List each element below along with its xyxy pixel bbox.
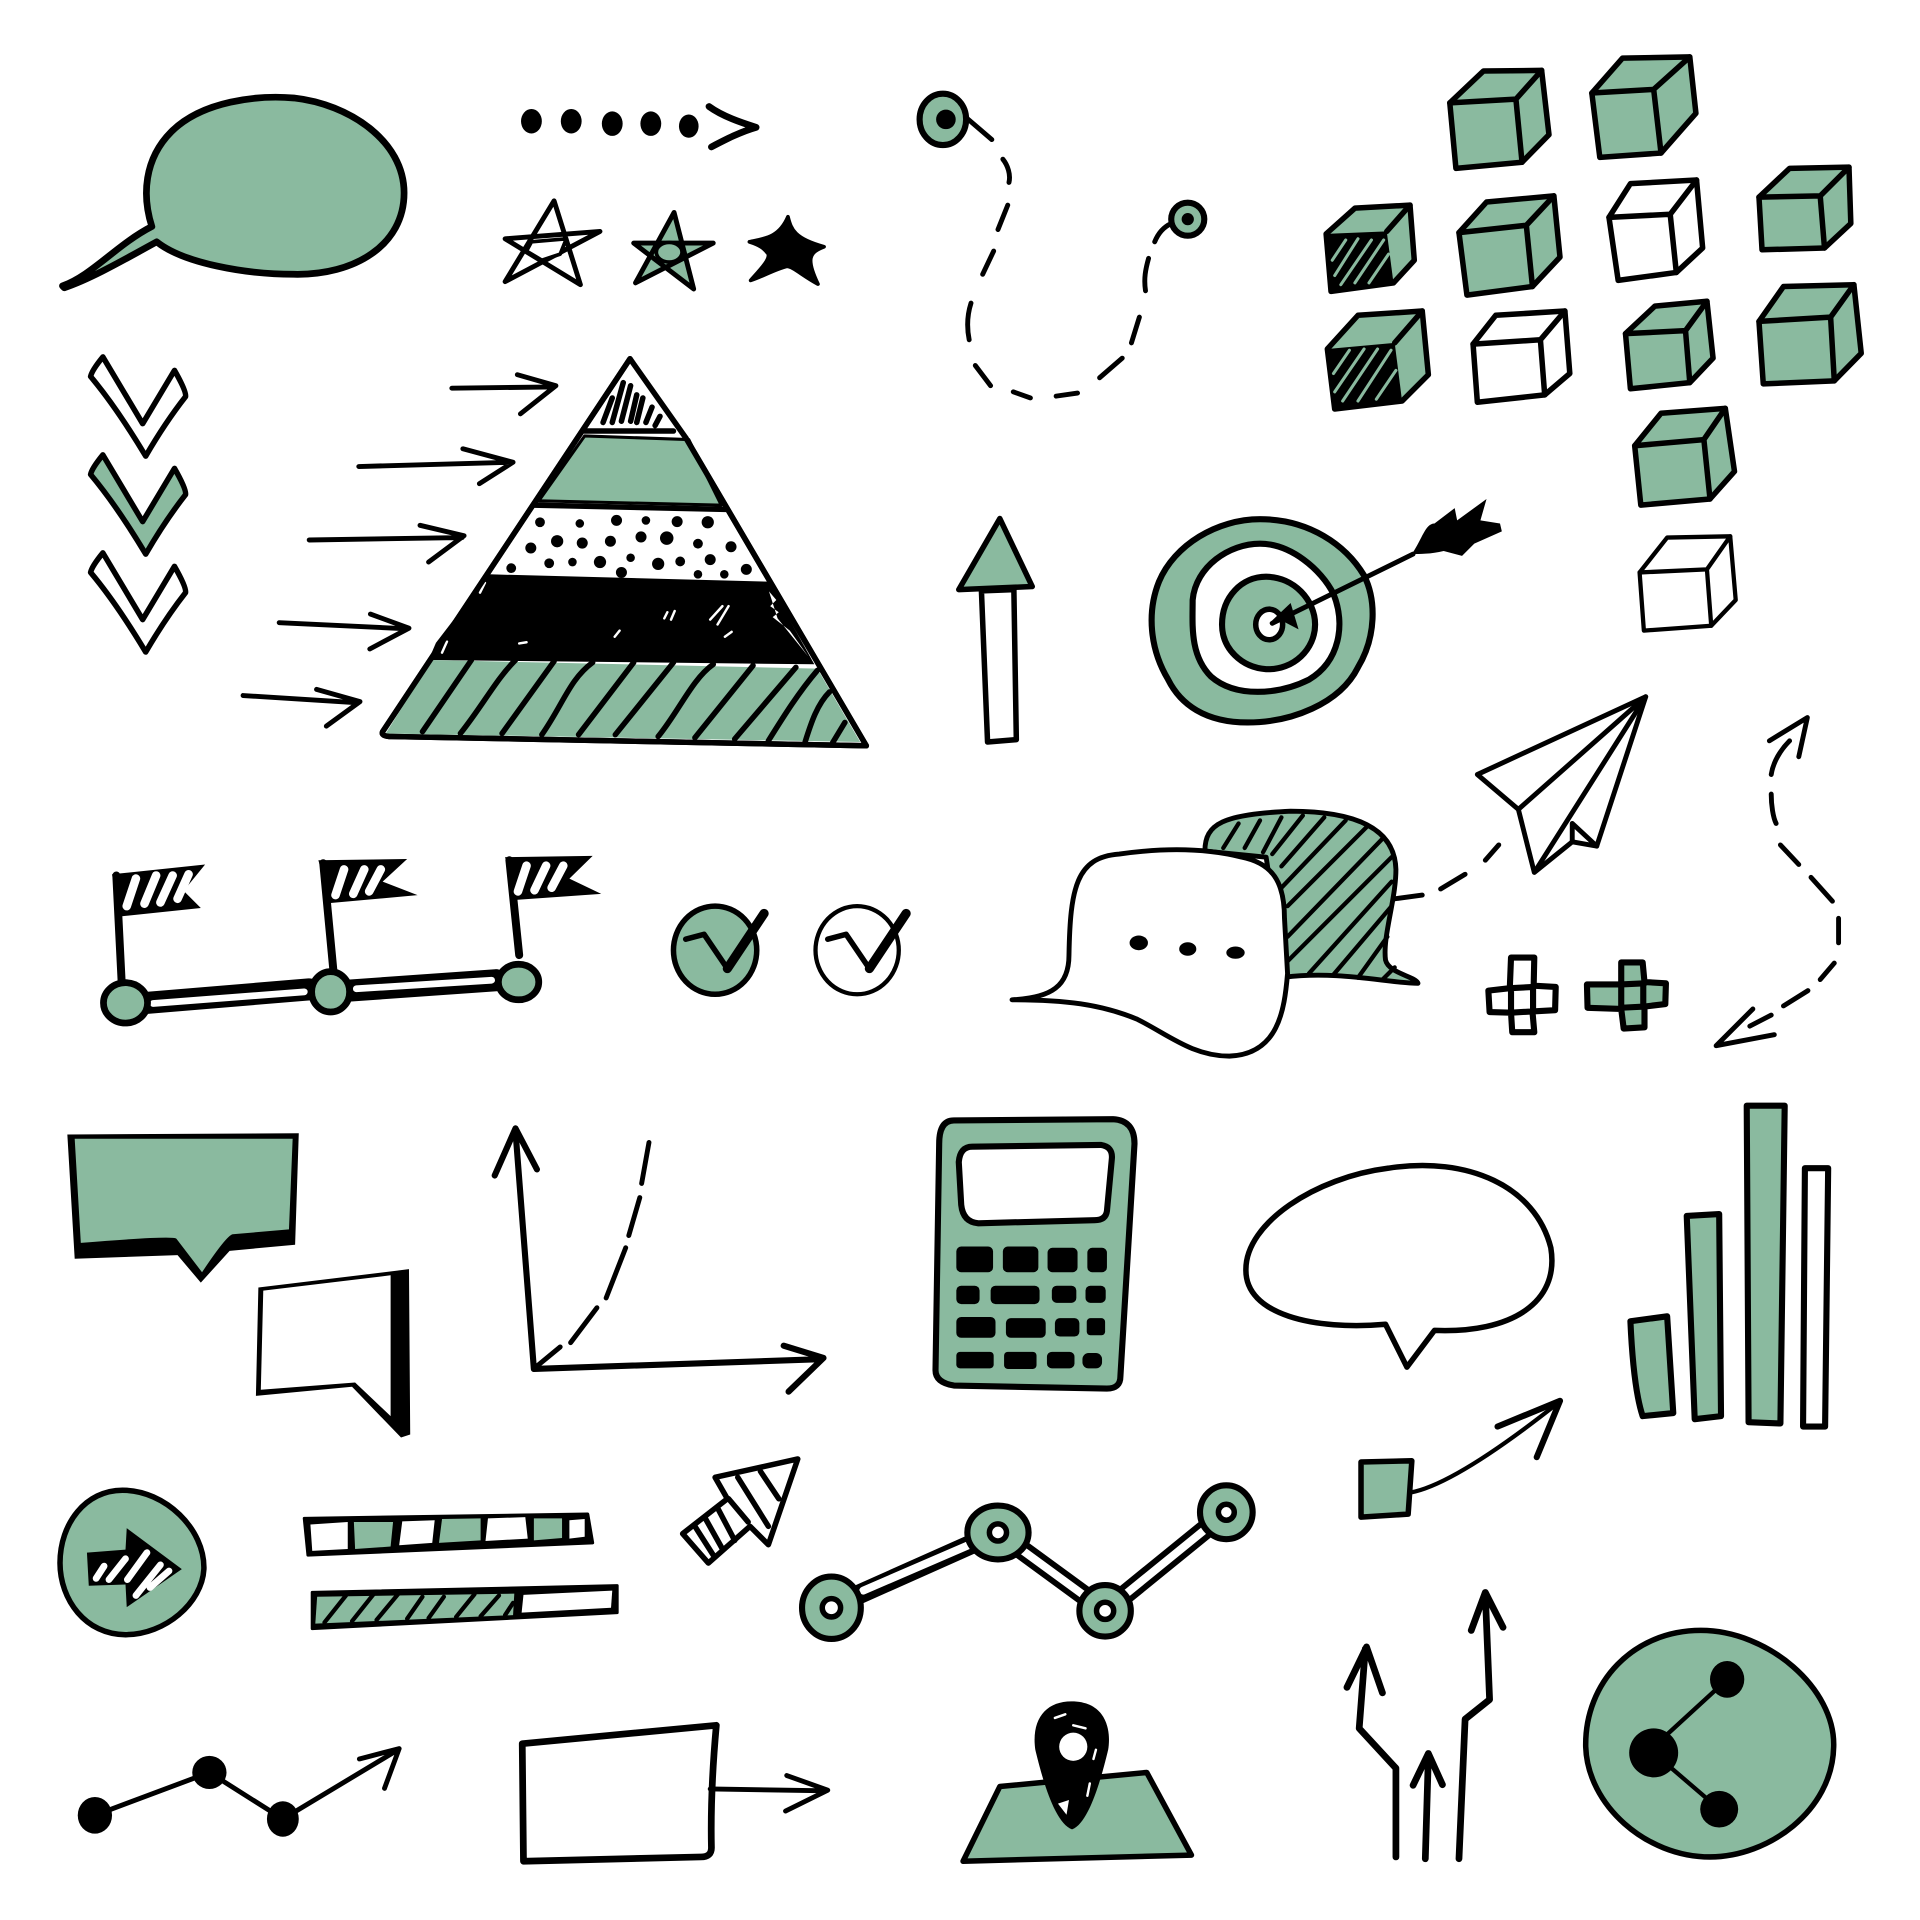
pyramid black band	[429, 574, 814, 664]
cube 10	[1759, 285, 1861, 384]
pyramid dotted band	[506, 505, 752, 579]
share icon in green circle	[1586, 1630, 1834, 1857]
cube 3 hatched	[1326, 205, 1414, 291]
paper plane	[1477, 697, 1646, 872]
arrows pointing to pyramid	[243, 375, 556, 726]
dashed route: end target	[1171, 203, 1204, 236]
circle with striped arrow	[60, 1490, 204, 1635]
calculator keys	[956, 1247, 1107, 1369]
rectangle with arrow	[522, 1725, 828, 1861]
check badge: white	[816, 906, 906, 994]
star: black	[749, 217, 824, 284]
dashed route path	[966, 118, 1171, 398]
calculator screen	[959, 1145, 1112, 1223]
pyramid top hatch	[585, 383, 673, 431]
dotted arrow	[521, 107, 756, 147]
plus icon: green grid	[1587, 962, 1666, 1029]
dashed curved arrow	[1716, 718, 1839, 1046]
three upward arrows	[1347, 1592, 1503, 1859]
white oval speech bubble	[1246, 1166, 1552, 1367]
map with location pin	[963, 1701, 1191, 1861]
chat bubble: green hatched back	[1205, 811, 1418, 983]
cube 11	[1635, 408, 1734, 505]
star: green	[634, 212, 713, 289]
growth curve axes	[495, 1128, 823, 1392]
dashed trail from plane	[1395, 845, 1499, 899]
chevron: white bottom	[91, 553, 186, 652]
cube 4	[1459, 196, 1560, 295]
flag timeline: flags	[112, 856, 601, 986]
plus icon: white grid	[1488, 958, 1556, 1032]
bar chart	[1630, 1106, 1828, 1427]
cube 12 white	[1640, 536, 1736, 631]
cube 5 white	[1609, 180, 1703, 280]
square with rising arrow	[1361, 1401, 1560, 1517]
progress bar: segmented	[304, 1514, 593, 1555]
pyramid green band	[539, 436, 721, 505]
chevron: white top	[91, 357, 186, 456]
check badge: green	[673, 906, 764, 994]
green rectangular speech bubble	[67, 1133, 299, 1283]
cube 9	[1626, 301, 1713, 389]
pyramid chart	[382, 359, 866, 746]
target with arrow	[1152, 499, 1502, 722]
white rectangular speech bubble	[256, 1269, 410, 1438]
cube 8 white	[1473, 311, 1570, 402]
up arrow: green head white shaft	[959, 519, 1032, 742]
chat bubble: white front with dots	[1012, 850, 1288, 1056]
cube 1	[1450, 70, 1549, 168]
flag timeline: connected bar with nodes	[103, 964, 539, 1023]
cube 7 hatched	[1327, 311, 1428, 409]
dashed route: start target	[920, 94, 966, 145]
cube 6	[1759, 167, 1851, 250]
progress bar: striped fill	[312, 1586, 617, 1629]
striped up-right arrow	[683, 1459, 798, 1563]
small line chart with arrow	[78, 1749, 399, 1837]
star: outline	[505, 201, 600, 285]
speech bubble: green with tail	[62, 97, 404, 288]
chevron: green middle	[91, 455, 186, 554]
node line chart	[802, 1485, 1253, 1639]
cube 2	[1592, 57, 1696, 157]
calculator	[936, 1119, 1134, 1389]
pyramid striped band	[382, 359, 866, 746]
